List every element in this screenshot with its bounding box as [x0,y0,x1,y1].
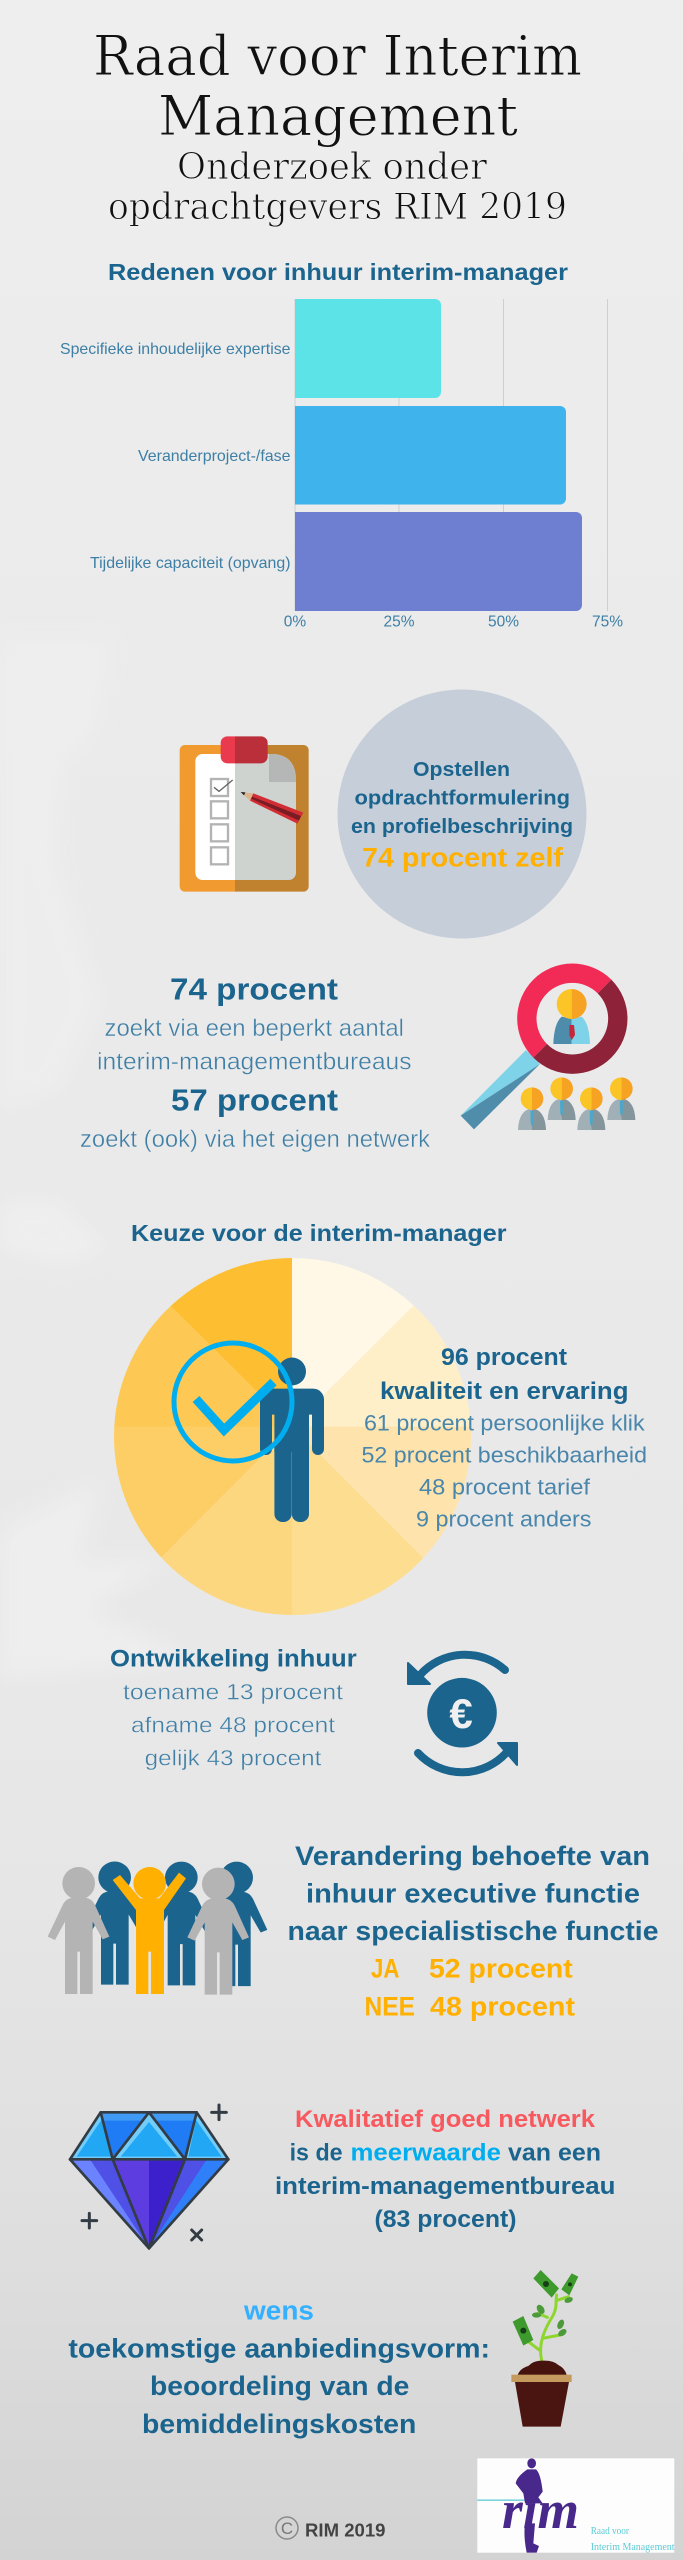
heading: redenen voor inhuur: Redenen voor inhuur interim-manager [108,259,568,285]
text block: wens: wens [243,2296,314,2326]
text block: verandering behoefte: inhuur executive functie [306,1879,640,1909]
axis labels: 0% [284,614,306,630]
panel: opstellen opdrachtformulering: Opstellen [413,759,510,781]
text block: keuze criteria: 61 procent persoonlijke klik [364,1411,646,1436]
grey person left [48,1867,109,1994]
icon: clipboard with checklist [180,736,309,892]
text block: zoekkanalen: 57 procent [171,1083,338,1118]
text block: keuze criteria [362,1344,647,1532]
text block: ontwikkeling inhuur [110,1646,357,1771]
text block: verandering behoefte: NEE [364,1991,415,2021]
text block: ontwikkeling inhuur: Ontwikkeling inhuur [110,1646,357,1672]
text block: meerwaarde: (83 procent) [374,2206,516,2233]
panel: opstellen opdrachtformulering: opdrachtformulering [354,788,570,810]
logo: RIM [477,2458,675,2553]
text block: keuze criteria: 9 procent anders [416,1506,592,1532]
category labels: Veranderproject-/fase [138,448,291,465]
text block: zoekkanalen: zoekt (ook) via het eigen netwerk [80,1126,431,1153]
small person 2 [548,1077,576,1120]
title: Management [158,84,518,148]
subtitle: Onderzoek onder [177,147,488,188]
text block: keuze criteria: kwaliteit en ervaring [380,1378,628,1405]
icon: euro with cycle arrows [408,1655,517,1772]
text block: keuze criteria: 52 procent beschikbaarheid [362,1442,647,1467]
logo: RIM: rim [502,2480,579,2540]
subtitle: opdrachtgevers RIM 2019 [108,187,567,228]
footer: copyright: C [281,2519,293,2538]
icon: euro with cycle arrows: € [449,1690,473,1737]
title [93,24,582,148]
category labels [60,341,291,572]
yellow person [113,1867,186,1994]
icon: check mark circle [174,1343,292,1461]
text block: wens: beoordeling van de [150,2371,409,2401]
axis labels: 75% [592,614,623,630]
blue person left [84,1861,145,1985]
text block: meerwaarde: van een [508,2140,601,2166]
text block: verandering behoefte: naar specialistische functie [288,1916,658,1946]
axis labels [284,614,623,630]
text block: zoekkanalen: zoekt via een beperkt aantal [104,1015,404,1042]
text block: wens: toekomstige aanbiedingsvorm: [68,2334,490,2364]
text block: zoekkanalen: interim-managementbureaus [97,1048,412,1075]
bar: specifieke inhoudelijke expertise [295,299,441,398]
plus and cross marks [82,2105,226,2240]
text block: ontwikkeling inhuur: toename 13 procent [123,1680,343,1705]
axis labels: 25% [383,614,415,630]
text block: keuze criteria: 48 procent tarief [419,1475,591,1500]
text block: zoekkanalen: 74 procent [170,972,338,1007]
text block: verandering behoefte: 52 procent [429,1954,573,1984]
text block: wens: bemiddelingskosten [142,2409,416,2439]
text block: wens [68,2296,490,2439]
text block: meerwaarde: Kwalitatief goed netwerk [295,2106,595,2133]
bar: tijdelijke capaciteit [295,512,582,611]
title: Raad voor Interim [93,24,582,88]
small person 4 [607,1077,635,1120]
pie chart [114,1258,471,1615]
text block: keuze criteria: 96 procent [441,1344,567,1371]
icon: magnifier over people [461,964,635,1130]
small person 3 [577,1087,605,1130]
logo: RIM: Raad voor [591,2526,629,2537]
blue person right [206,1862,267,1986]
footer: copyright [276,2517,386,2541]
category labels: Tijdelijke capaciteit (opvang) [90,555,290,572]
footer: copyright: RIM 2019 [305,2521,386,2541]
text block: ontwikkeling inhuur: afname 48 procent [131,1713,335,1738]
grey person right [187,1868,249,1995]
text block: meerwaarde: is de [290,2140,343,2166]
text block: ontwikkeling inhuur: gelijk 43 procent [145,1746,321,1771]
logo figure [516,2458,543,2553]
text block: meerwaarde: meerwaarde [350,2140,501,2166]
axis labels: 50% [488,614,519,630]
panel: opstellen opdrachtformulering: 74 procent zelf [362,842,564,872]
text block: verandering behoefte [288,1841,658,2021]
icon: group of people [48,1861,267,1995]
icon: person figure [260,1358,324,1522]
panel: opstellen opdrachtformulering [338,690,586,938]
icon: money plant [511,2270,578,2427]
bar: veranderproject [295,406,566,504]
text block: meerwaarde: interim-managementbureau [275,2173,615,2200]
text block: verandering behoefte: JA [371,1954,399,1984]
subtitle [108,147,567,228]
icon: diamond [70,2105,228,2248]
small person 1 [518,1087,546,1130]
text block: verandering behoefte: 48 procent [430,1991,575,2021]
bar chart [60,299,623,630]
panel: opstellen opdrachtformulering: en profielbeschrijving [351,816,573,838]
logo: RIM: Interim Management [591,2542,675,2553]
text block: verandering behoefte: Verandering behoefte van [295,1841,650,1871]
text block: zoekkanalen [80,972,431,1153]
category labels: Specifieke inhoudelijke expertise [60,341,291,358]
heading: keuze voor de interim-manager: Keuze voor de interim-manager [131,1220,507,1246]
blue person middle [150,1862,212,1985]
text block: meerwaarde [275,2106,615,2233]
